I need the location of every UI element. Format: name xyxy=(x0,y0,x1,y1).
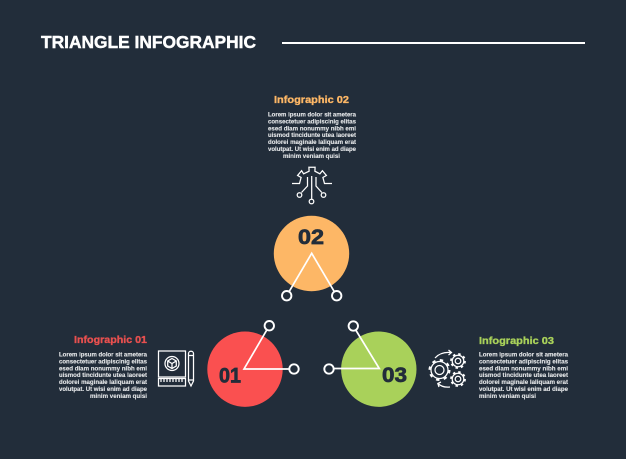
heading 03: Infographic 03 xyxy=(479,335,554,347)
text block 01 xyxy=(59,352,148,400)
connector lines 02 xyxy=(287,253,337,296)
text block 01: uismod tincidunte utea laoreet xyxy=(59,373,147,379)
node top 01 xyxy=(265,321,274,330)
node left 02 xyxy=(282,291,291,300)
text block 02: esed diam nonummy nibh emi xyxy=(268,126,356,132)
number 02: 02 xyxy=(298,226,324,249)
text block 03: minim veniam quisi xyxy=(479,394,536,400)
icon: gear circuit xyxy=(292,167,332,204)
text block 02: minim veniam quisi xyxy=(283,154,340,160)
text block 03: consectetuer adipiscinig elitas xyxy=(479,359,569,365)
node top 03 xyxy=(349,321,358,331)
connector lines 01 xyxy=(244,326,294,369)
number 01: 01 xyxy=(219,365,241,388)
text block 03: dolorei maginale laliquam erat xyxy=(479,380,568,386)
panel: infographic 03 xyxy=(324,321,569,407)
text block 02: Lorem ipsum dolor sit ametera xyxy=(268,112,357,118)
text block 03: Lorem ipsum dolor sit ametera xyxy=(479,352,569,358)
circle 03 xyxy=(341,332,416,407)
text block 01: consectetuer adipiscinig elitas xyxy=(59,359,148,365)
node left 03 xyxy=(324,364,334,374)
text block 03: esed diam nonummy nibh emi xyxy=(479,366,568,372)
text block 01: Lorem ipsum dolor sit ametera xyxy=(59,352,148,358)
text block 03: uismod tincidunte utea laoreet xyxy=(479,373,568,379)
icon: gears with arrows xyxy=(430,350,465,387)
connector lines 03 xyxy=(329,326,379,368)
node right 01 xyxy=(289,364,299,374)
text block 03: volutpat. Ut wisi enim ad diape xyxy=(479,387,569,393)
text block 02: dolorei maginale laliquam erat xyxy=(268,140,356,146)
text block 02: volutpat. Ut wisi enim ad diape xyxy=(268,147,357,153)
heading 01: Infographic 01 xyxy=(74,334,147,346)
text block 02: uismod tincidunte utea laoreet xyxy=(268,133,356,139)
text block 01: esed diam nonummy nibh emi xyxy=(59,366,147,372)
number 03: 03 xyxy=(382,364,407,387)
icon: blueprint, ruler and pencil xyxy=(158,351,194,386)
panel: infographic 01 xyxy=(59,321,299,407)
text block 01: minim veniam quisi xyxy=(90,394,147,400)
heading 02: Infographic 02 xyxy=(274,94,349,106)
title: TRIANGLE INFOGRAPHIC xyxy=(41,32,256,52)
text block 02: consectetuer adipiscinig elitas xyxy=(268,119,357,125)
text block 01: dolorei maginale laliquam erat xyxy=(59,380,147,386)
text block 01: volutpat. Ut wisi enim ad diape xyxy=(59,387,148,393)
panel: infographic 02 xyxy=(268,94,357,300)
node right 02 xyxy=(332,291,341,300)
circle 02 xyxy=(274,216,349,291)
text block 03 xyxy=(479,352,569,400)
circle 01 xyxy=(207,332,283,407)
text block 02 xyxy=(268,112,357,160)
